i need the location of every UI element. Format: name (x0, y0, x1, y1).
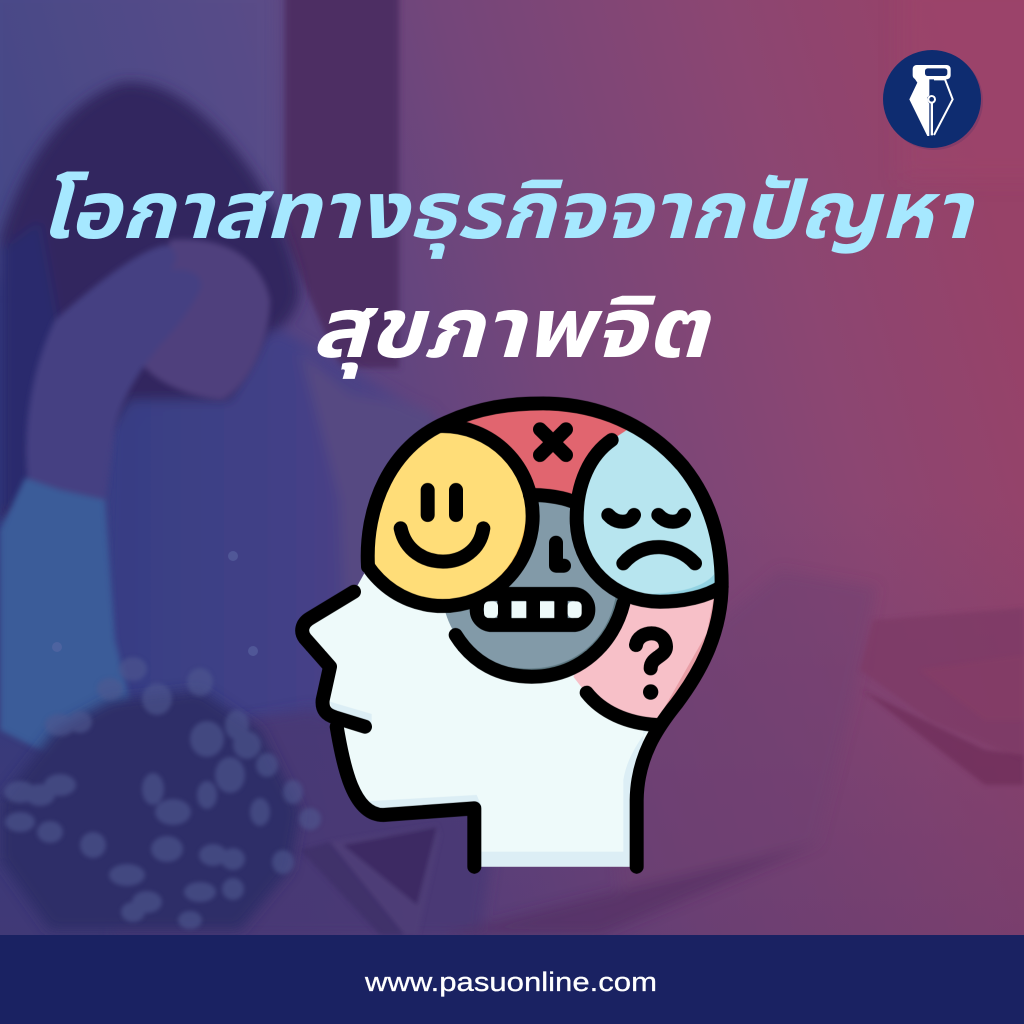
footer bar (0, 935, 1024, 1024)
region fills (330, 400, 728, 867)
logo: pen nib badge (883, 50, 983, 150)
outlines (302, 403, 722, 867)
shirt buttons (52, 551, 258, 656)
icon: nib (909, 65, 953, 136)
desk and laptop (110, 570, 877, 935)
icon: head with emotions (302, 400, 728, 867)
wall and window (0, 0, 1024, 280)
question dot (643, 684, 658, 700)
title line 1: โอกาสทางธุรกิจจากปัญหา (39, 166, 976, 259)
head fill (302, 403, 722, 867)
woman (0, 82, 445, 720)
title line 2: สุขภาพจิต (311, 281, 713, 379)
website url: www.pasuonline.com (364, 967, 657, 997)
teeth (484, 601, 582, 618)
potted plant (0, 657, 321, 930)
